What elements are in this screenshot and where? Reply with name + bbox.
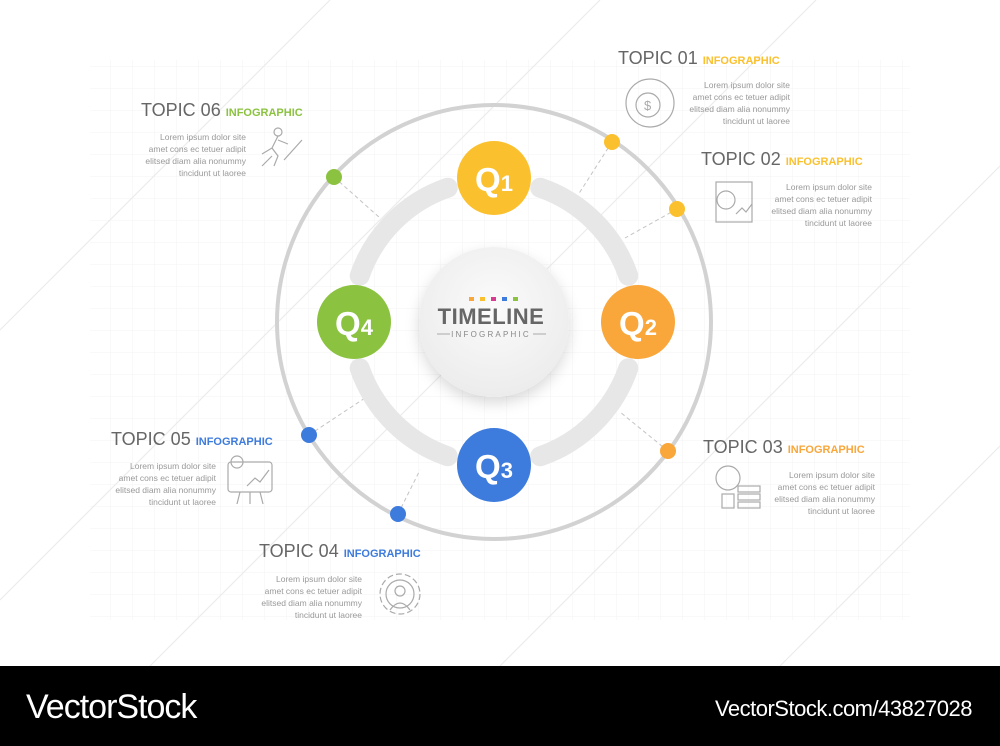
- Q3: [457, 428, 531, 502]
- topic 05: TOPIC 05 INFOGRAPHIC: [111, 429, 273, 449]
- icon: document chart: [716, 182, 752, 222]
- Q3: Q3: [475, 448, 513, 485]
- footer bar: VectorStock: [26, 688, 198, 726]
- topic 05: tincidunt ut laoree: [149, 497, 216, 507]
- topic 03: elitsed diam alia nonummy: [774, 494, 876, 504]
- topic 05: Lorem ipsum dolor site: [130, 461, 216, 471]
- topic 05: [111, 429, 273, 507]
- topic 01: tincidunt ut laoree: [723, 116, 790, 126]
- icon: dollar chart: $: [644, 98, 652, 113]
- Q2: Q2: [619, 305, 657, 342]
- Q1: [457, 141, 531, 215]
- topic 06: elitsed diam alia nonummy: [145, 156, 247, 166]
- topic 04: amet cons ec tetuer adipit: [265, 586, 363, 596]
- topic 03: TOPIC 03 INFOGRAPHIC: [703, 437, 865, 457]
- topic 04: Lorem ipsum dolor site: [276, 574, 362, 584]
- topic 01: [618, 48, 791, 127]
- Q4: Q4: [335, 305, 374, 342]
- icon: cloud database: [716, 466, 760, 508]
- topic 04: tincidunt ut laoree: [295, 610, 362, 620]
- Q4: [317, 285, 391, 359]
- topic 05: amet cons ec tetuer adipit: [119, 473, 217, 483]
- topic 02: elitsed diam alia nonummy: [771, 206, 873, 216]
- center disc: timeline title: INFOGRAPHIC: [451, 330, 531, 339]
- Q2: [601, 285, 675, 359]
- topic 01: amet cons ec tetuer adipit: [693, 92, 791, 102]
- icon: presentation board: [228, 456, 272, 504]
- topic 06: Lorem ipsum dolor site: [160, 132, 246, 142]
- topic 03: Lorem ipsum dolor site: [789, 470, 875, 480]
- topic 03: [703, 437, 876, 516]
- Q1: Q1: [475, 161, 513, 198]
- topic 06: tincidunt ut laoree: [179, 168, 246, 178]
- topic 01: Lorem ipsum dolor site: [704, 80, 790, 90]
- topic 02: [701, 149, 873, 228]
- topic 03: amet cons ec tetuer adipit: [778, 482, 876, 492]
- outer ring: [277, 105, 711, 539]
- topic 02: Lorem ipsum dolor site: [786, 182, 872, 192]
- footer bar: VectorStock.com/43827028: [715, 696, 972, 721]
- footer bar: [0, 666, 1000, 746]
- connector dashed lines: [309, 142, 677, 514]
- topic 01: elitsed diam alia nonummy: [689, 104, 791, 114]
- icon: climbing person: [262, 128, 302, 166]
- topic 06: amet cons ec tetuer adipit: [149, 144, 247, 154]
- icon: gear person: [380, 574, 420, 614]
- topic 02: tincidunt ut laoree: [805, 218, 872, 228]
- center disc: timeline title: TIMELINE: [438, 304, 544, 329]
- topic 03: tincidunt ut laoree: [808, 506, 875, 516]
- topic 06: [141, 100, 303, 178]
- topic 02: TOPIC 02 INFOGRAPHIC: [701, 149, 863, 169]
- icon: dollar chart: [626, 79, 674, 127]
- center disc: timeline title: [419, 247, 569, 397]
- inner arc ring: [360, 188, 628, 456]
- topic 02: amet cons ec tetuer adipit: [775, 194, 873, 204]
- topic 04: [259, 541, 421, 620]
- topic 06: TOPIC 06 INFOGRAPHIC: [141, 100, 303, 120]
- topic 05: elitsed diam alia nonummy: [115, 485, 217, 495]
- marker dots: [301, 134, 685, 522]
- topic 04: elitsed diam alia nonummy: [261, 598, 363, 608]
- topic 04: TOPIC 04 INFOGRAPHIC: [259, 541, 421, 561]
- topic 01: TOPIC 01 INFOGRAPHIC: [618, 48, 780, 68]
